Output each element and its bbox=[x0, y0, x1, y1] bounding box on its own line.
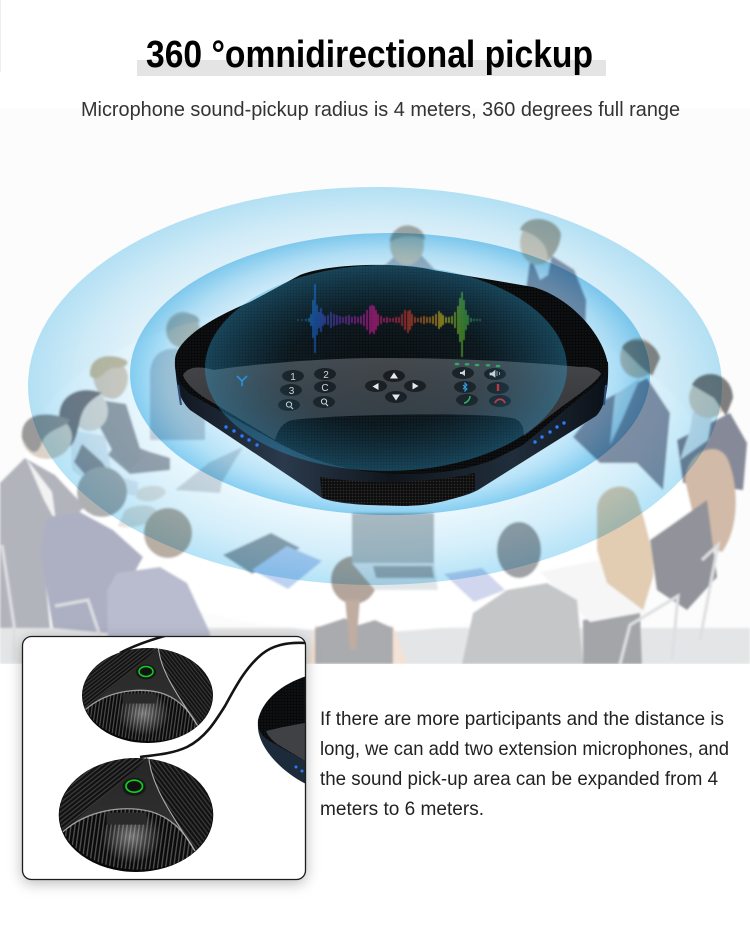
meeting room photo background bbox=[0, 218, 750, 664]
keypad left: 1 bbox=[290, 372, 296, 383]
person: man at far right bbox=[677, 374, 747, 490]
description text: long, we can add two extension microphones, and bbox=[320, 738, 729, 760]
keypad left: 3 bbox=[289, 386, 295, 397]
blue LEDs right edge bbox=[533, 421, 566, 444]
blue LEDs left edge bbox=[224, 425, 259, 447]
description text: If there are more participants and the distance is bbox=[320, 708, 724, 730]
person: red haired woman bbox=[650, 449, 736, 610]
person: man right with raised arm bbox=[573, 338, 670, 490]
colourful sound waveform bbox=[298, 284, 480, 357]
extension microphone card bbox=[22, 635, 310, 880]
person: man seated front left bbox=[40, 467, 166, 633]
keypad left bbox=[278, 368, 336, 411]
keypad left: 2 bbox=[323, 370, 329, 381]
person: man seated front right bbox=[462, 522, 583, 664]
cables bbox=[120, 635, 306, 757]
status LEDs green bbox=[455, 363, 500, 367]
person: woman seated front left bbox=[107, 508, 212, 650]
blue logo mark bbox=[237, 376, 247, 386]
extension microphone upper bbox=[82, 648, 213, 743]
keypad left: C bbox=[321, 383, 329, 394]
arrow keys bbox=[365, 370, 426, 403]
extension microphone lower bbox=[59, 757, 213, 872]
person: man far left bbox=[0, 414, 85, 628]
subtitle: Microphone sound-pickup radius is 4 meters, 360 degrees full range bbox=[81, 98, 680, 121]
description text bbox=[320, 708, 729, 820]
laptop rear left bbox=[175, 447, 243, 493]
side speaker grille bbox=[320, 473, 475, 506]
device top surface bbox=[175, 265, 608, 474]
device body bbox=[175, 300, 608, 505]
laptop on table bbox=[352, 513, 438, 590]
sound pickup ring: outer bbox=[28, 187, 722, 585]
sound pickup ring: middle bbox=[130, 233, 650, 515]
control panel bbox=[183, 358, 601, 440]
description text: meters to 6 meters. bbox=[320, 798, 484, 820]
main unit cropped bbox=[258, 676, 305, 784]
description text: the sound pick-up area can be expanded from 4 bbox=[320, 768, 718, 790]
conference speakerphone bbox=[175, 265, 608, 506]
person: man top centre bbox=[380, 225, 435, 300]
person: blond woman bbox=[540, 487, 653, 664]
books on table bbox=[223, 533, 505, 602]
person: woman seated front centre bbox=[307, 556, 408, 664]
chairs bbox=[2, 545, 718, 664]
title: 360 °omnidirectional pickup bbox=[146, 34, 593, 76]
person: man left rear in light shirt bbox=[150, 312, 205, 440]
person: bearded man rear left bbox=[90, 356, 170, 474]
person: man top right bbox=[520, 219, 586, 335]
person: woman in glasses bbox=[59, 390, 138, 496]
side ports bbox=[178, 385, 181, 405]
function keys right bbox=[452, 367, 511, 407]
sound pickup ring: inner overlay bbox=[205, 265, 567, 471]
table bbox=[43, 374, 692, 632]
